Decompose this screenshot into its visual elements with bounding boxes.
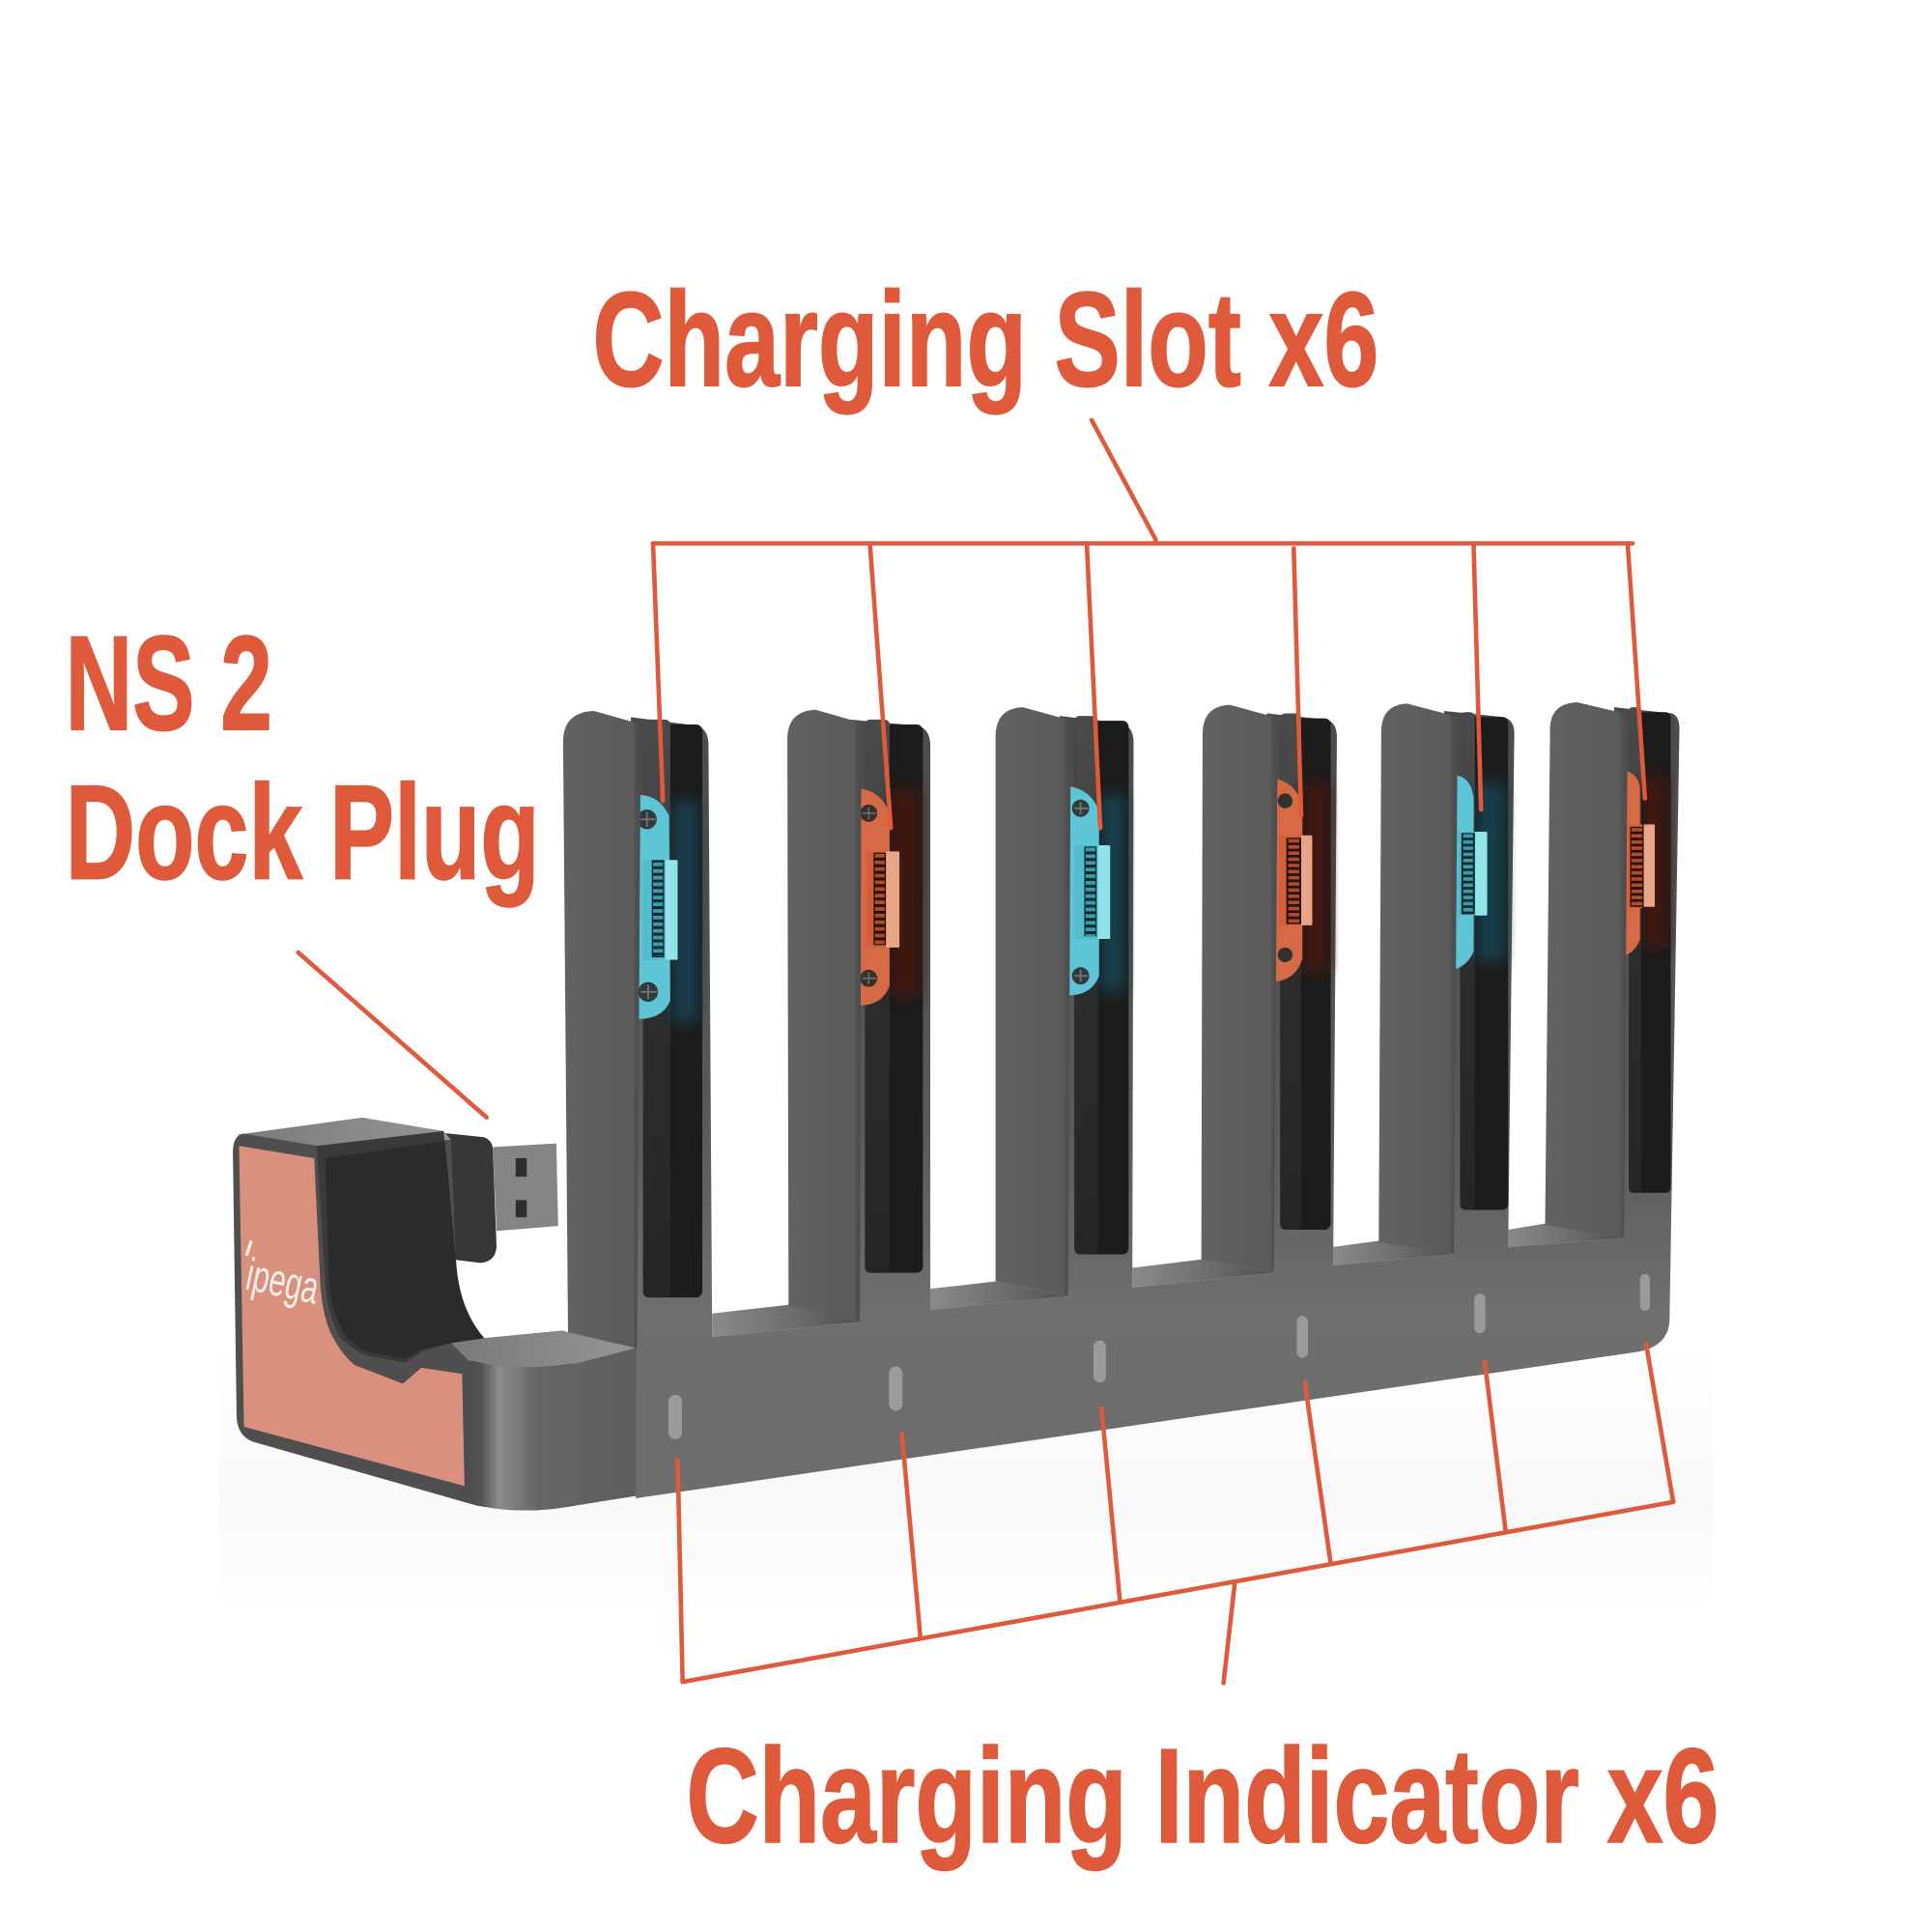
ipega logo xyxy=(242,1240,324,1315)
tower 3: slot with teal connector xyxy=(1067,716,1128,1254)
dock cradle xyxy=(317,1131,484,1363)
shelves between towers xyxy=(712,1224,1624,1337)
tower 3 side plate xyxy=(996,707,1070,1296)
dock shelf xyxy=(451,1331,636,1367)
tower 1: slot with teal connector xyxy=(637,720,702,1297)
heading: Charging Slot x6: Charging Slot x6 xyxy=(593,265,1378,414)
tower 5 side plate xyxy=(1378,703,1458,1254)
salmon panel xyxy=(239,1146,465,1486)
floor shadow xyxy=(219,1343,1713,1602)
front face of charger base xyxy=(631,707,1680,1498)
tower 2 side plate xyxy=(787,710,862,1322)
dock outer shell xyxy=(233,1133,636,1510)
ipega logo: ipega xyxy=(242,1249,324,1315)
tower 5: slot with teal connector xyxy=(1454,712,1508,1210)
callout lines: charging indicator bracket xyxy=(678,1345,1673,1683)
USB plug xyxy=(438,1132,558,1263)
tower 6: slot with orange connector xyxy=(1624,707,1671,1193)
tower 2: slot with orange connector xyxy=(860,720,923,1273)
dock front corner xyxy=(465,1348,636,1510)
heading: Dock Plug: Dock Plug xyxy=(66,757,540,907)
callout lines: charging slot bracket xyxy=(653,420,1645,828)
heading: NS 2: NS 2 xyxy=(66,609,272,758)
tower 1 side plate xyxy=(563,711,640,1350)
tower 4: slot with orange connector xyxy=(1274,714,1331,1230)
dock body xyxy=(233,1118,636,1510)
dock top surface xyxy=(237,1118,451,1149)
callout line: dock plug xyxy=(298,952,487,1118)
tower 4 side plate xyxy=(1202,705,1278,1273)
charging indicators xyxy=(668,1274,1650,1439)
tower 6 side plate xyxy=(1545,702,1628,1238)
